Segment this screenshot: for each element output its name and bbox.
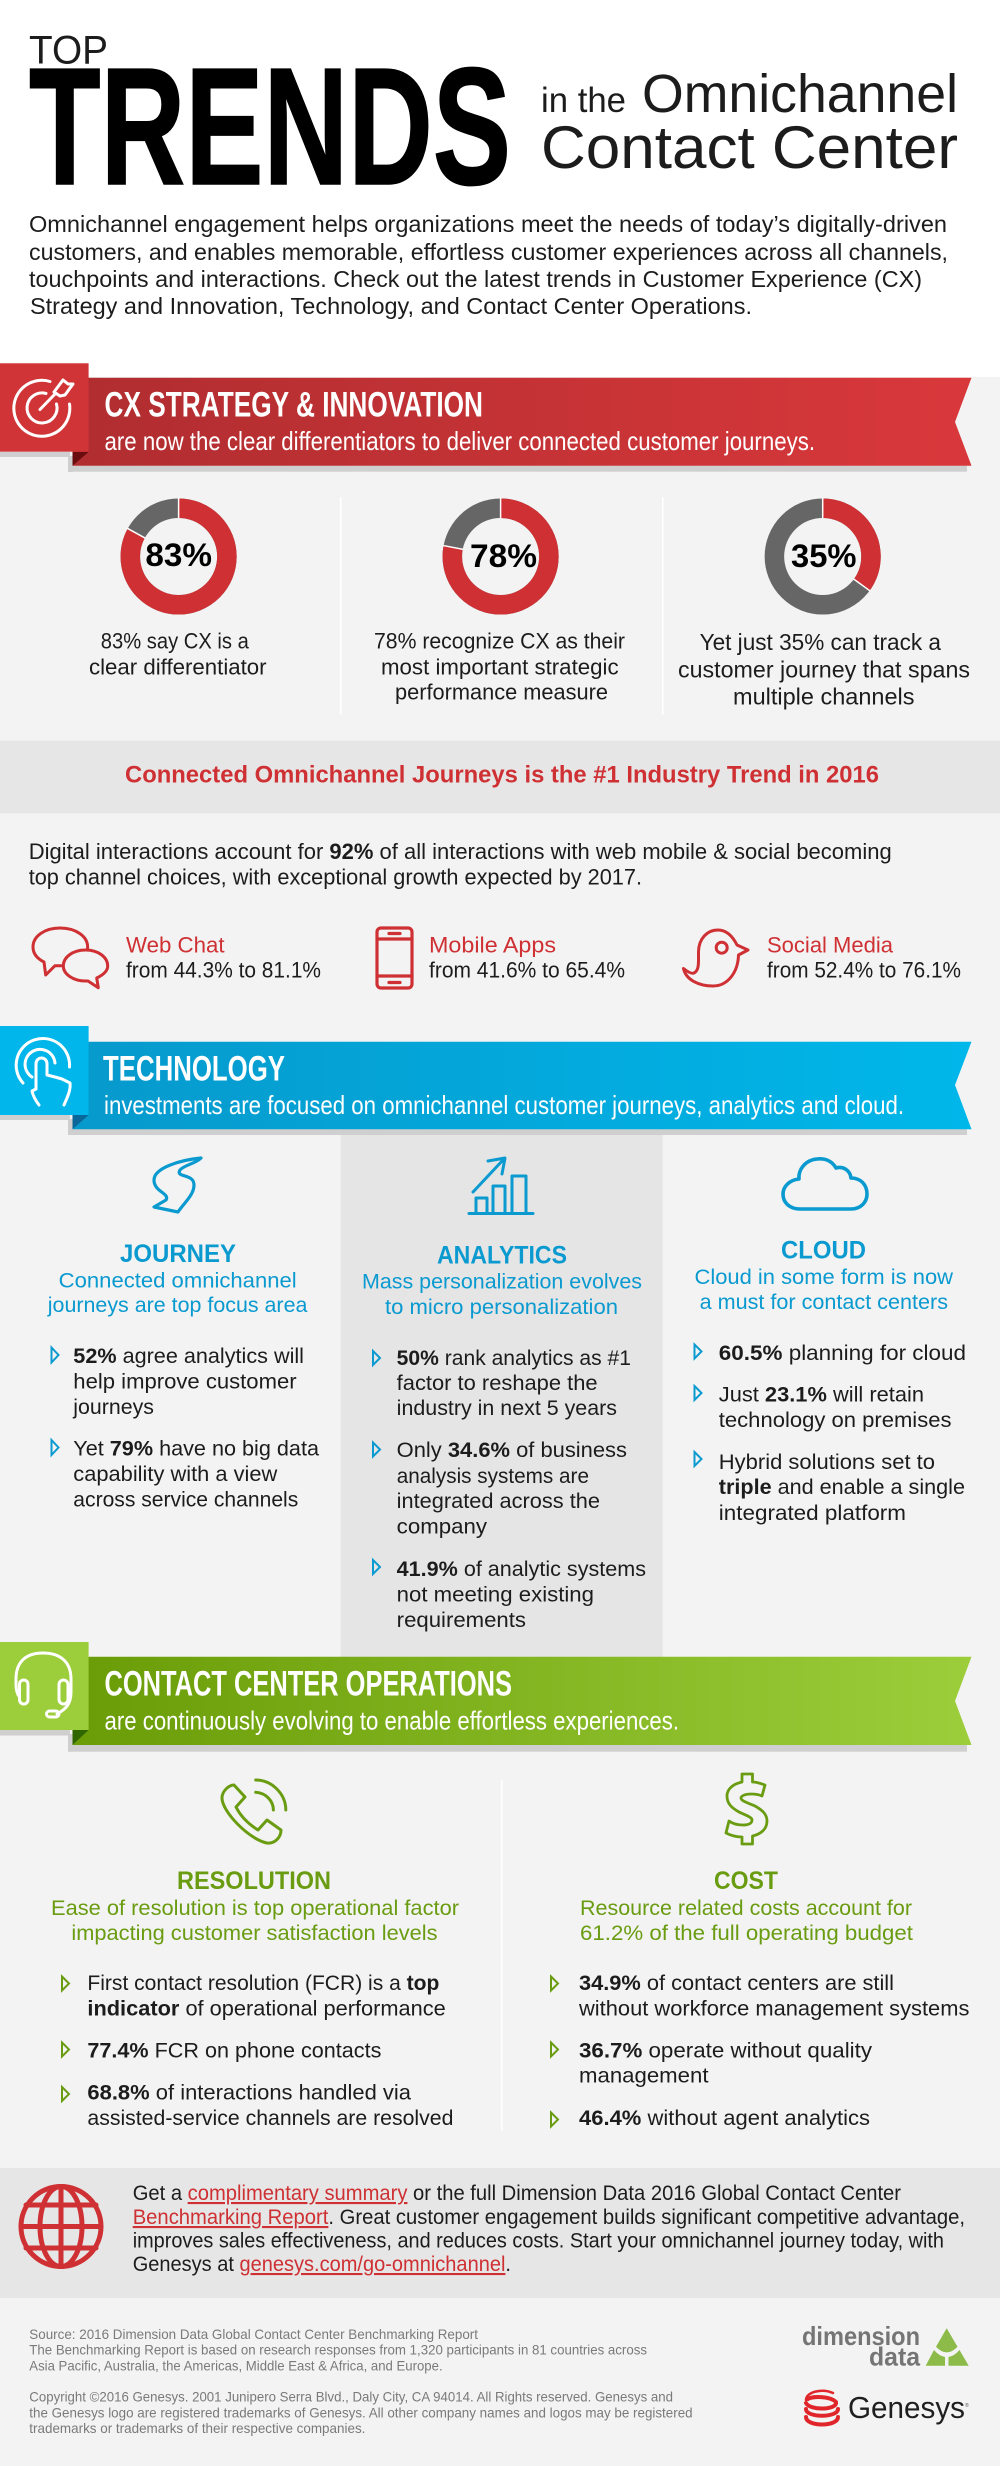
bullets: journey: capability with a view (73, 1463, 278, 1486)
bullets: cloud: Just 23.1% will retain (719, 1384, 924, 1407)
title: TOP (29, 28, 108, 72)
digital interactions text: top channel choices, with exceptional growth expected by 2017. (29, 865, 642, 890)
banner: technology: TECHNOLOGY (103, 1049, 285, 1088)
caption: 35%: multiple channels (733, 684, 914, 710)
heading: cloud: a must for contact centers (700, 1291, 948, 1314)
panel: call to action (0, 2168, 1000, 2298)
footer: source: Asia Pacific, Australia, the Americas, Middle East & Africa, and Europe. (29, 2357, 443, 2373)
bullets: journey: 52% agree analytics will (73, 1345, 304, 1368)
stat: web chat (126, 932, 321, 983)
heading: cost: 61.2% of the full operating budget (580, 1922, 913, 1945)
icon: mobile phone (377, 928, 412, 988)
bullets: analytics: 41.9% of analytic systems (397, 1558, 646, 1581)
bullets: analytics: requirements (397, 1609, 526, 1632)
bullets: cost: 46.4% without agent analytics (579, 2107, 870, 2130)
footer: copyright: Copyright ©2016 Genesys. 2001 Junipero Serra Blvd., Daly City, CA 94014. All Rights reserved. Genesys and (29, 2389, 673, 2405)
footer: source (29, 2326, 647, 2373)
heading: cloud: Cloud in some form is now (694, 1266, 954, 1289)
heading: resolution: Ease of resolution is top operational factor (51, 1897, 459, 1920)
caption: 78%: performance measure (395, 679, 608, 704)
logo: dimension data: dimension (802, 2321, 920, 2351)
intro text: touchpoints and interactions. Check out the latest trends in Customer Experience (CX) (29, 266, 922, 292)
logo: genesys: ® (965, 2402, 969, 2409)
band: industry trend: Connected Omnichannel Journeys is the #1 Industry Trend in 2016 (125, 761, 879, 788)
title: in the (541, 81, 626, 120)
icon: touch (16, 1038, 70, 1105)
intro text: Strategy and Innovation, Technology, and Contact Center Operations. (30, 293, 752, 319)
heading: resolution: impacting customer satisfaction levels (71, 1922, 438, 1945)
bullets: cost: without workforce management systems (578, 1998, 969, 2021)
heading: cost: Resource related costs account for (580, 1897, 912, 1920)
bullets: cost (551, 1972, 969, 2130)
heading: journey: JOURNEY (120, 1240, 236, 1268)
title: TRENDS (29, 34, 511, 220)
bullets: cost: 36.7% operate without quality (579, 2040, 873, 2063)
bullets: cloud (694, 1342, 966, 1525)
bullets: journey (52, 1345, 319, 1512)
caption: 83% (89, 629, 267, 680)
title: Contact Center (541, 114, 958, 181)
band: industry trend (0, 741, 1000, 813)
heading: resolution: RESOLUTION (177, 1867, 331, 1895)
footer: copyright: trademarks or trademarks of their respective companies. (29, 2420, 365, 2436)
logo: dimension data (802, 2321, 969, 2372)
bullets: analytics: Only 34.6% of business (397, 1439, 627, 1462)
caption: 78% (374, 629, 625, 704)
bullets: resolution: First contact resolution (FCR) is a top (87, 1972, 439, 1995)
banner: contact center operations: are continuously evolving to enable effortless experiences. (104, 1705, 679, 1735)
stat: social media (767, 932, 961, 983)
banner: CX strategy: are now the clear differentiators to deliver connected customer journeys. (104, 426, 815, 456)
icon: cloud (783, 1159, 867, 1209)
bullets: cloud: integrated platform (719, 1502, 906, 1525)
bullets: analytics: analysis systems are (397, 1465, 589, 1488)
text: call to action (133, 2182, 965, 2276)
text: call to action: Genesys at genesys.com/go-omnichannel. (133, 2253, 511, 2276)
title: Omnichannel (642, 64, 958, 124)
icon: web chat (33, 928, 108, 988)
footer: copyright (29, 2389, 693, 2436)
heading: cost: COST (714, 1867, 778, 1895)
icon: dollar sign (726, 1774, 767, 1844)
bullets: resolution: assisted-service channels are resolved (87, 2107, 453, 2130)
footer: source: The Benchmarking Report is based on research responses from 1,320 participants in 81 countries across (29, 2342, 647, 2358)
column: cloud (694, 1159, 966, 1525)
bullets: analytics: 50% rank analytics as #1 (397, 1347, 631, 1370)
stat: mobile apps (429, 932, 625, 983)
column: resolution (51, 1780, 459, 2130)
donut: 35%: 35% (791, 538, 856, 574)
icon: social bird (684, 930, 748, 986)
icon: headset (16, 1653, 71, 1717)
bullets: resolution (62, 1972, 453, 2130)
heading: analytics (362, 1242, 642, 1319)
banner: technology (0, 1026, 972, 1135)
bullets: cloud: Hybrid solutions set to (719, 1451, 935, 1474)
bullets: analytics (373, 1347, 646, 1632)
donut: 78%: 78% (470, 538, 537, 574)
heading: cost (580, 1867, 913, 1945)
bullets: analytics: factor to reshape the (397, 1372, 598, 1395)
intro text: customers, and enables memorable, effortless customer experiences across all channels, (29, 239, 948, 265)
heading: analytics: to micro personalization (385, 1296, 618, 1319)
intro text (29, 211, 948, 319)
bullets: analytics: industry in next 5 years (397, 1397, 617, 1420)
bullets: cost: management (579, 2065, 709, 2088)
donut: 35% (774, 498, 871, 605)
stat: mobile apps: Mobile Apps (429, 932, 556, 957)
heading: analytics: ANALYTICS (437, 1242, 567, 1270)
bullets: analytics: company (397, 1516, 488, 1538)
column: journey (47, 1158, 319, 1512)
heading: cloud: CLOUD (781, 1236, 866, 1264)
text: call to action: Benchmarking Report. Great customer engagement builds significant competitive advantage, (133, 2206, 965, 2229)
text: call to action: improves sales effectiveness, and reduces costs. Start your omnichannel journey today, with (133, 2230, 944, 2253)
intro text: Omnichannel engagement helps organizations meet the needs of today’s digitally-driven (29, 211, 947, 237)
icon: globe (21, 2186, 101, 2266)
caption: 83%: 83% say CX is a (101, 629, 249, 654)
bullets: journey: journeys (72, 1396, 154, 1419)
donut: 83%: 83% (145, 537, 212, 573)
donut: 78% (443, 498, 549, 605)
heading: resolution (51, 1867, 459, 1945)
caption: 83%: clear differentiator (89, 655, 267, 680)
column: analytics (362, 1158, 646, 1632)
heading: journey: journeys are top focus area (47, 1294, 308, 1317)
stat: web chat: from 44.3% to 81.1% (126, 958, 321, 983)
bullets: resolution: 68.8% of interactions handled via (87, 2081, 411, 2104)
bullets: journey: Yet 79% have no big data (73, 1438, 319, 1460)
stat: social media: Social Media (767, 932, 894, 957)
digital interactions text: Digital interactions account for 92% of all interactions with web mobile & social becoming (29, 839, 892, 864)
text: call to action: Get a complimentary summary or the full Dimension Data 2016 Global Contact Center (133, 2182, 901, 2205)
stat: web chat: Web Chat (126, 932, 224, 957)
heading: journey (47, 1240, 308, 1317)
footer: copyright: the Genesys logo are registered trademarks of Genesys. All other company names and logos may be registered (29, 2404, 693, 2420)
bullets: resolution: indicator of operational performance (87, 1998, 446, 2021)
bullets: analytics: not meeting existing (397, 1584, 594, 1607)
icon: target (14, 380, 73, 436)
digital interactions text (29, 839, 892, 890)
caption: 35%: customer journey that spans (678, 656, 970, 682)
bullets: cost: 34.9% of contact centers are still (579, 1972, 894, 1995)
stat: mobile apps: from 41.6% to 65.4% (429, 958, 625, 983)
caption: 35%: Yet just 35% can track a (700, 629, 942, 655)
bullets: resolution: 77.4% FCR on phone contacts (87, 2040, 381, 2063)
heading: journey: Connected omnichannel (59, 1269, 297, 1292)
heading: analytics: Mass personalization evolves (362, 1271, 642, 1294)
icon: journey road (154, 1158, 201, 1212)
banner: contact center operations (0, 1642, 972, 1752)
bullets: analytics: integrated across the (397, 1490, 600, 1513)
analytics column background (341, 1129, 663, 1657)
column: cost (551, 1774, 969, 2130)
donut: 83% (127, 498, 227, 605)
logo: dimension data: data (869, 2342, 921, 2372)
banner: CX strategy (0, 363, 972, 472)
stat: social media: from 52.4% to 76.1% (767, 958, 961, 983)
footer: source: Source: 2016 Dimension Data Global Contact Center Benchmarking Report (29, 2326, 478, 2342)
icon: phone handset (222, 1780, 286, 1843)
caption: 78%: 78% recognize CX as their (374, 629, 625, 654)
icon: analytics chart (469, 1158, 533, 1214)
logo: genesys: Genesys (848, 2390, 965, 2425)
heading: cloud (694, 1236, 954, 1314)
caption: 35% (678, 629, 970, 710)
bullets: journey: help improve customer (73, 1371, 297, 1394)
bullets: journey: across service channels (73, 1488, 298, 1512)
banner: CX strategy: CX STRATEGY & INNOVATION (104, 386, 483, 424)
bullets: cloud: technology on premises (719, 1409, 952, 1432)
caption: 78%: most important strategic (381, 655, 619, 680)
bullets: cloud: 60.5% planning for cloud (719, 1342, 966, 1365)
banner: contact center operations: CONTACT CENTER OPERATIONS (104, 1665, 512, 1704)
bullets: cloud: triple and enable a single (719, 1476, 965, 1499)
